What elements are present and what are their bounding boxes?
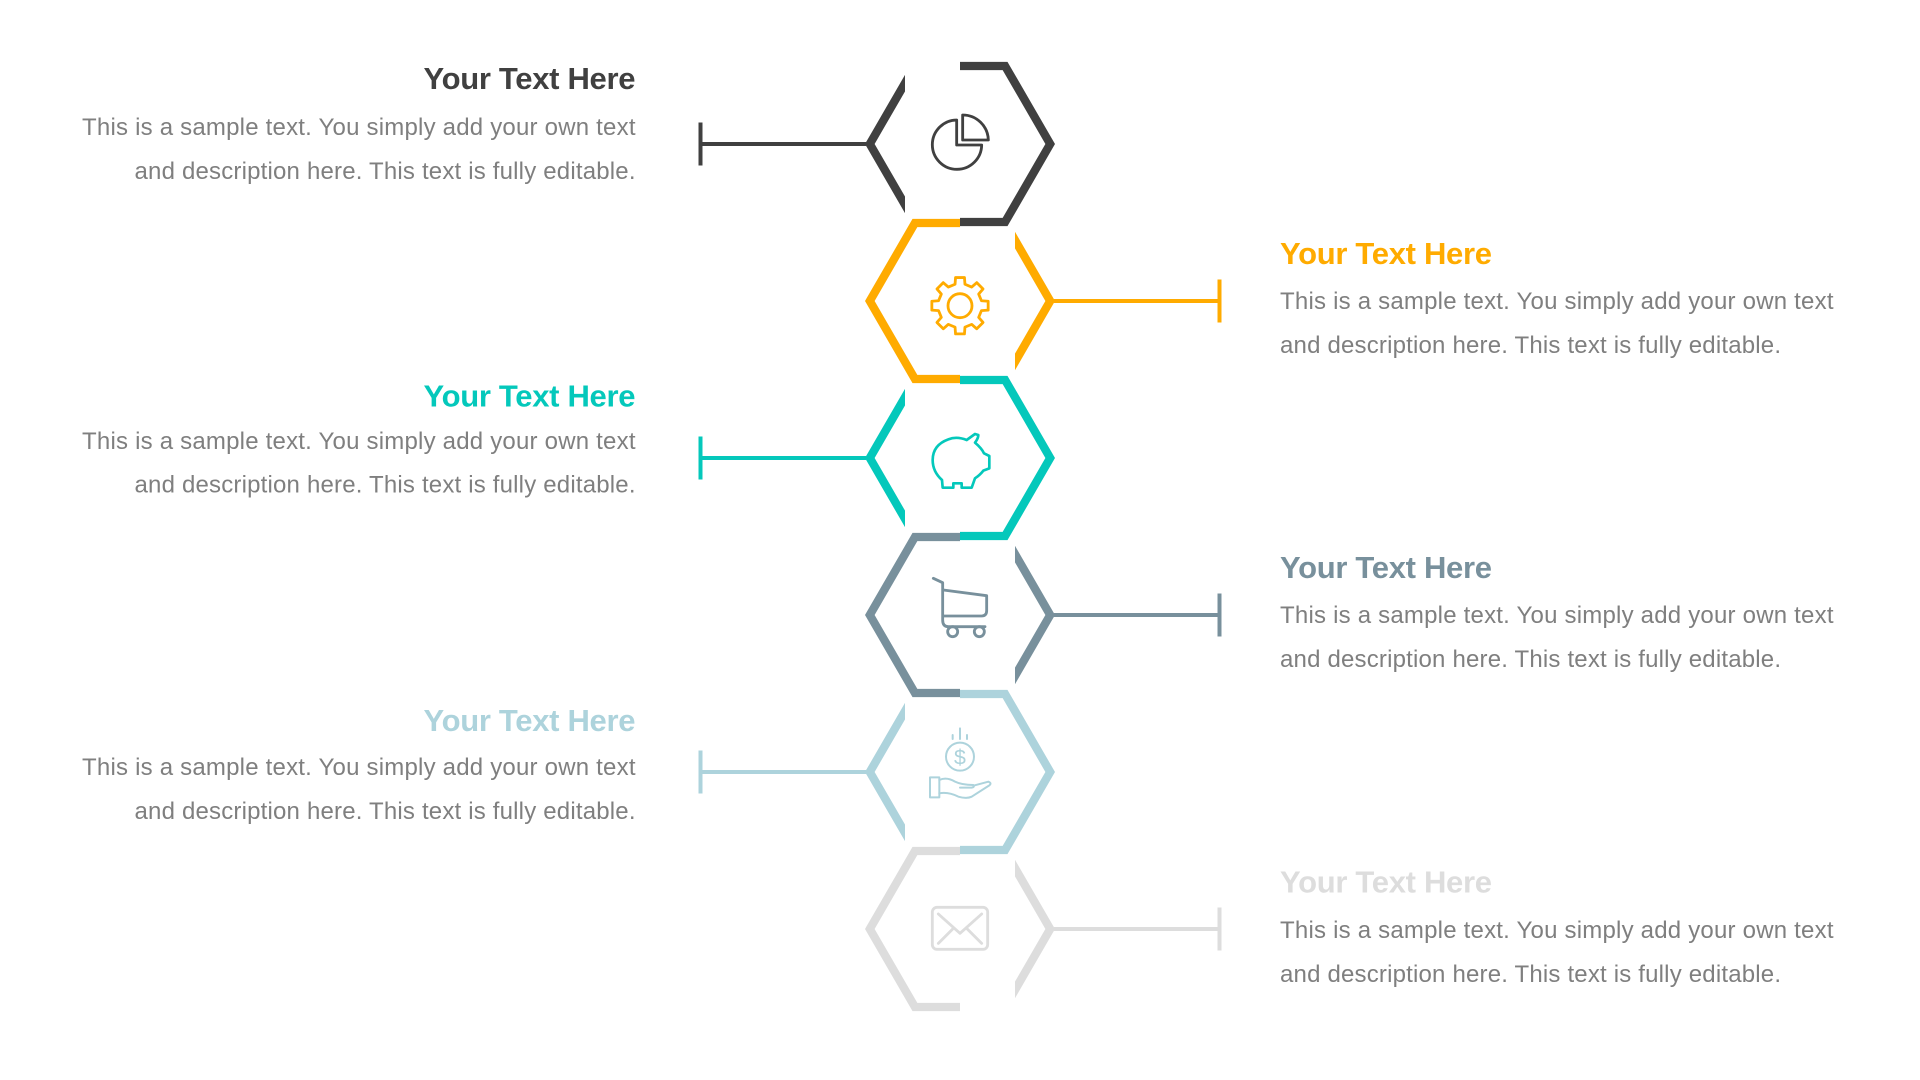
- step 3: hexagon with connector and piggy icon: [700, 380, 1050, 536]
- description 5: and description here. This text is fully editable.: [134, 798, 636, 825]
- description 1: This is a sample text. You simply add your own text: [82, 114, 636, 141]
- text block 1: [82, 61, 636, 185]
- description 6: [1280, 917, 1834, 988]
- icon: hand with coin: [930, 728, 990, 798]
- text block 6: [1280, 864, 1834, 988]
- text block 2: [1280, 236, 1834, 359]
- step 2: hexagon with connector and gear icon: [870, 223, 1220, 379]
- step 6: hexagon with connector and mail icon: [870, 851, 1220, 1007]
- description 3: This is a sample text. You simply add your own text: [82, 428, 636, 455]
- step 5: hexagon with connector and money hand icon: [700, 694, 1050, 850]
- description 6: and description here. This text is fully editable.: [1280, 961, 1781, 988]
- description 2: and description here. This text is fully editable.: [1280, 332, 1781, 359]
- description 5: This is a sample text. You simply add your own text: [82, 754, 636, 781]
- connector line right: [1054, 908, 1220, 950]
- connector line left: [700, 122, 866, 166]
- hexagon outline: [870, 223, 1050, 379]
- description 6: This is a sample text. You simply add your own text: [1280, 917, 1834, 944]
- icon: envelope: [932, 907, 988, 949]
- icon: pie chart: [932, 115, 988, 169]
- step 1: hexagon with connector and pie icon: [700, 66, 1050, 222]
- connector line right: [1054, 594, 1220, 636]
- heading 3: Your Text Here: [424, 378, 636, 414]
- text block 3: [82, 378, 636, 498]
- text block 4: [1280, 550, 1834, 673]
- hexagon outline: [870, 66, 1050, 222]
- step 4: hexagon with connector and cart icon: [870, 537, 1220, 693]
- heading 6: Your Text Here: [1280, 864, 1492, 900]
- hexagon outline: [870, 537, 1050, 693]
- description 2: This is a sample text. You simply add your own text: [1280, 288, 1834, 315]
- text block 5: [82, 703, 636, 825]
- icon: shopping cart: [933, 578, 987, 637]
- heading 1: Your Text Here: [424, 61, 636, 96]
- hexagon outline: [870, 694, 1050, 850]
- description 4: and description here. This text is fully editable.: [1280, 646, 1781, 673]
- description 5: [82, 754, 636, 825]
- icon: gear: [932, 278, 988, 334]
- description 3: [82, 428, 636, 498]
- hexagon outline: [870, 851, 1050, 1007]
- connector line right: [1054, 280, 1220, 322]
- heading 2: Your Text Here: [1280, 236, 1492, 271]
- connector line left: [700, 436, 866, 480]
- heading 5: Your Text Here: [424, 703, 636, 738]
- connector line left: [700, 750, 866, 794]
- heading 4: Your Text Here: [1280, 550, 1492, 585]
- hexagon outline: [870, 380, 1050, 536]
- description 1: and description here. This text is fully editable.: [134, 158, 636, 185]
- description 4: [1280, 602, 1834, 673]
- icon: hand with coin: $: [954, 745, 966, 769]
- icon: piggy bank: [933, 434, 989, 488]
- description 4: This is a sample text. You simply add your own text: [1280, 602, 1834, 629]
- description 3: and description here. This text is fully editable.: [134, 472, 636, 498]
- description 2: [1280, 288, 1834, 359]
- description 1: [82, 114, 636, 185]
